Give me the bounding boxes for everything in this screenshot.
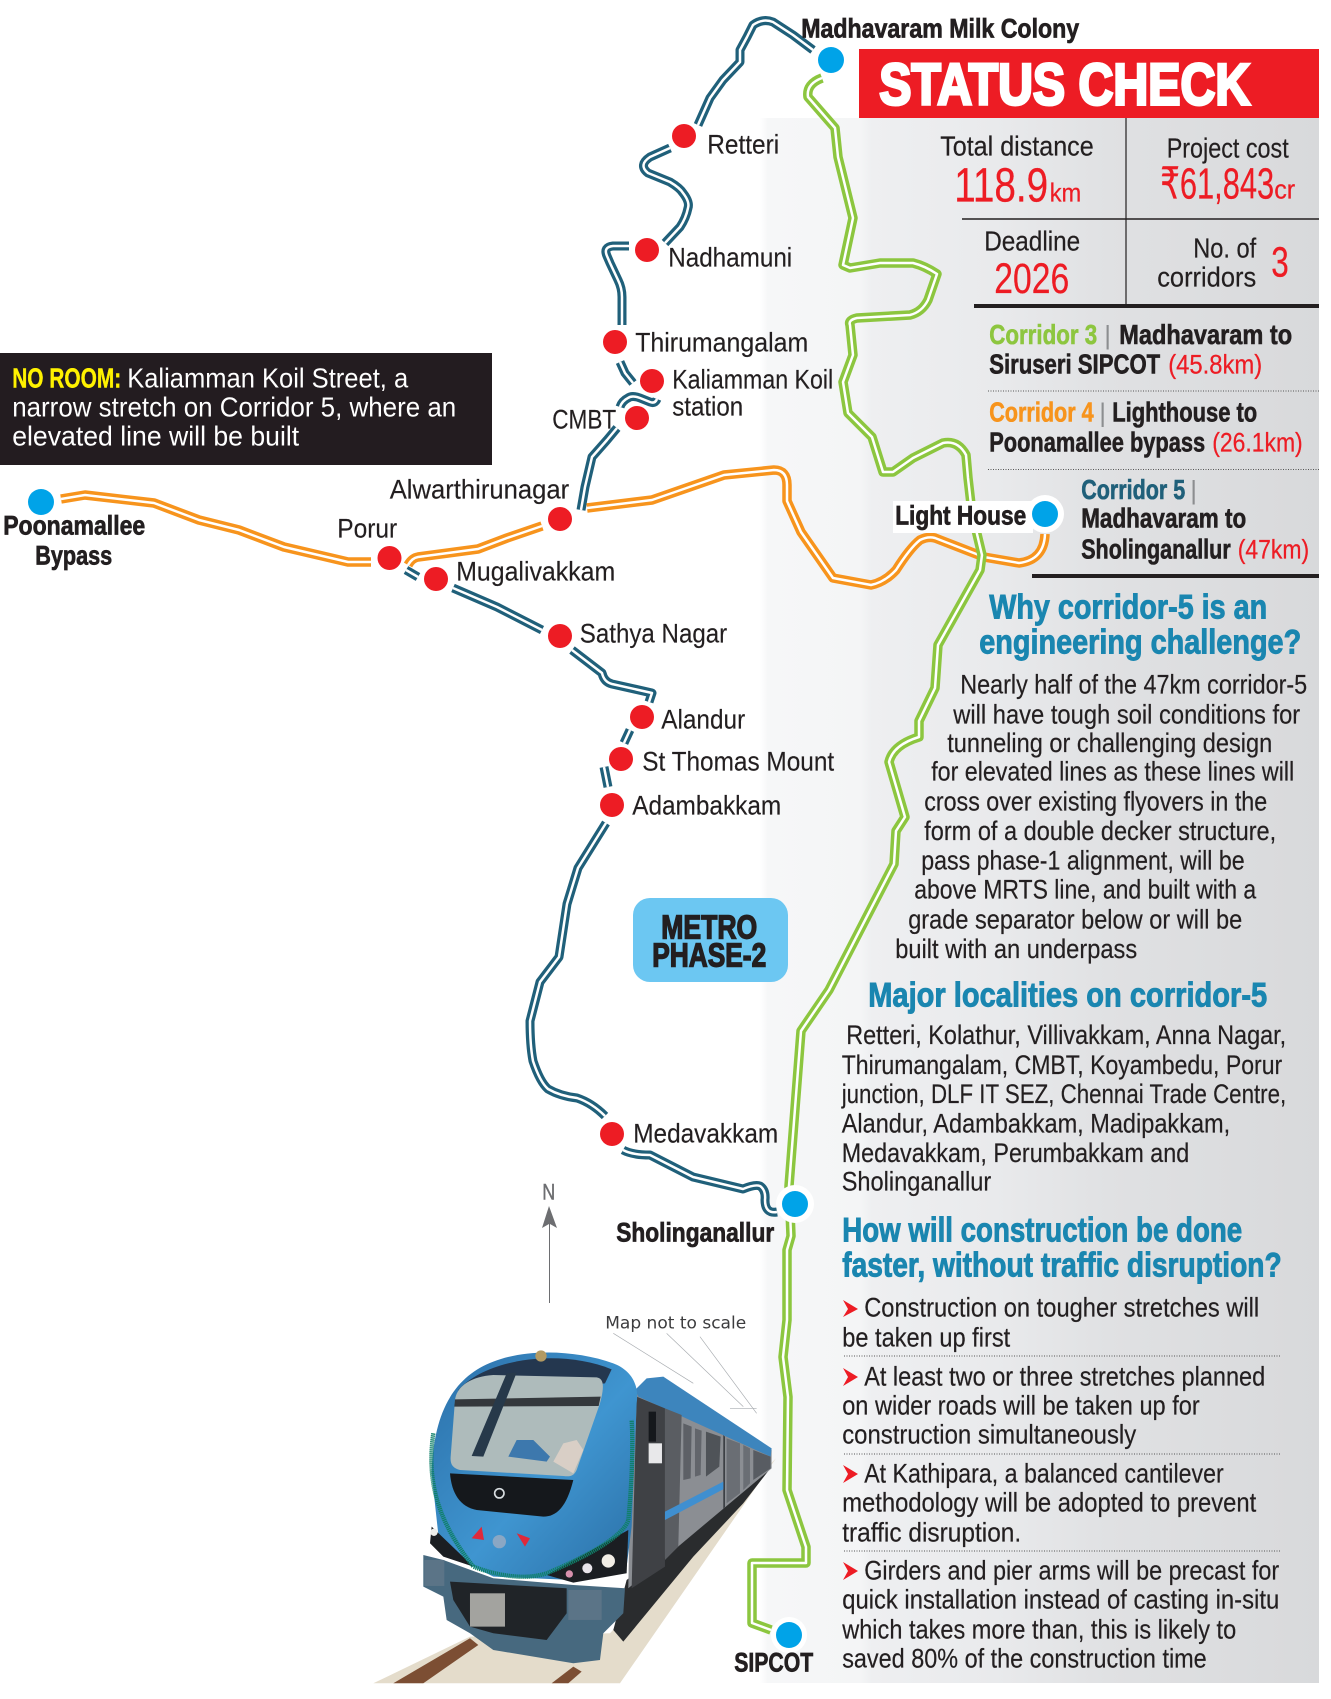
legend: corridor 3: Siruseri SIPCOT: [989, 348, 1160, 380]
stat: number of corridors: corridors: [1157, 262, 1256, 292]
legend: corridor 4: Poonamallee bypass: [989, 426, 1205, 458]
panel: status background: [760, 118, 1319, 1683]
legend: corridor 5: Corridor 5: [1081, 474, 1185, 505]
badge: Metro Phase-2: PHASE-2: [652, 936, 766, 974]
map: station dots: [28, 47, 844, 1653]
heading: how will construction be done faster: [842, 1212, 1282, 1284]
label: Poonamallee Bypass: [3, 510, 145, 570]
stat: total distance: 118.9: [954, 160, 1048, 212]
callout: No room: [0, 353, 492, 465]
label: Poonamallee Bypass: Bypass: [35, 540, 112, 570]
stat: project cost: [1160, 132, 1295, 208]
map: corridor 4 route line: [61, 470, 1045, 585]
text block: localities list: Medavakkam, Perumbakkam and: [842, 1138, 1189, 1168]
label: Poonamallee Bypass: Poonamallee: [3, 510, 145, 540]
legend: corridor 5: |: [1190, 475, 1197, 505]
callout: No room: Kaliamman Koil Street, a: [127, 362, 409, 394]
badge: Metro Phase-2: [633, 898, 788, 982]
stat: total distance: [940, 130, 1094, 212]
stat: deadline: Deadline: [984, 226, 1080, 256]
bullet: girders and pier arms: quick installation instead of casting in-situ: [842, 1584, 1279, 1614]
text block: localities list: Sholinganallur: [842, 1166, 991, 1196]
legend: corridor 5: Madhavaram to: [1081, 502, 1246, 534]
bullet: tougher stretches: be taken up first: [842, 1322, 1011, 1352]
legend: corridor 4: Corridor 4: [989, 396, 1094, 428]
label: Kaliamman Koil station: Kaliamman Koil: [672, 364, 833, 394]
stat: project cost: cr: [1274, 174, 1295, 204]
stat: total distance: km: [1050, 178, 1081, 208]
illustration: metro train: [373, 1333, 776, 1683]
legend: corridor 4: (26.1km): [1212, 428, 1303, 458]
heading: why corridor-5 is an engineering challenge: [979, 588, 1301, 662]
bullet: wider roads: At least two or three stretches planned: [864, 1362, 1265, 1392]
label: Sholinganallur: Sholinganallur: [616, 1218, 775, 1248]
label: Mugalivakkam: Mugalivakkam: [456, 556, 615, 586]
bullet: Kathipara: traffic disruption.: [842, 1518, 1021, 1548]
label: Alandur: Alandur: [661, 704, 745, 734]
legend: corridor 4: [989, 396, 1303, 458]
label: Sathya Nagar: Sathya Nagar: [580, 618, 727, 648]
bullet: Kathipara: methodology will be adopted to prevent: [842, 1488, 1257, 1518]
label: Porur: Porur: [337, 514, 397, 544]
label: Madhavaram Milk Colony: Madhavaram Milk Colony: [801, 14, 1079, 44]
label: Map not to scale: Map not to scale: [605, 1314, 746, 1334]
legend: corridor 3: (45.8km): [1168, 350, 1262, 380]
label: Medavakkam: Medavakkam: [633, 1118, 778, 1148]
text block: engineering challenge explanation: built with an underpass: [895, 934, 1137, 964]
text block: engineering challenge explanation: [895, 670, 1307, 964]
label: Kaliamman Koil station: [672, 364, 833, 422]
stat: number of corridors: 3: [1271, 238, 1289, 286]
legend: corridor 4: |: [1099, 398, 1106, 428]
label: SIPCOT: SIPCOT: [734, 1648, 814, 1678]
heading: how will construction be done faster: How will construction be done: [842, 1212, 1242, 1250]
stat: total distance: Total distance: [940, 130, 1094, 162]
label: Retteri: Retteri: [707, 130, 779, 160]
label: Thirumangalam: Thirumangalam: [635, 328, 808, 358]
text block: engineering challenge explanation: form of a double decker structure,: [924, 816, 1276, 846]
text block: engineering challenge explanation: tunneling or challenging design: [947, 728, 1272, 758]
bullet: tougher stretches: Construction on tougher stretches will: [864, 1292, 1259, 1322]
text block: localities list: [841, 1020, 1286, 1196]
bullet: girders and pier arms: which takes more than, this is likely to: [841, 1614, 1236, 1644]
legend: corridor 4: Lighthouse to: [1112, 396, 1257, 428]
label: Kaliamman Koil station: station: [672, 392, 743, 422]
bullet: girders and pier arms: [841, 1556, 1279, 1674]
callout: No room: narrow stretch on Corridor 5, where an: [12, 392, 456, 422]
label: Alwarthirunagar: Alwarthirunagar: [390, 474, 569, 504]
icon: north arrow: [542, 1180, 557, 1303]
bullet: wider roads: construction simultaneously: [842, 1420, 1137, 1450]
text block: localities list: Alandur, Adambakkam, Madipakkam,: [842, 1108, 1230, 1138]
heading: major localities: Major localities on corridor-5: [868, 976, 1267, 1014]
heading: why corridor-5 is an engineering challenge: Why corridor-5 is an: [989, 588, 1267, 626]
label: CMBT: CMBT: [552, 404, 616, 434]
bullet: girders and pier arms: Girders and pier arms will be precast for: [864, 1556, 1279, 1586]
legend: corridor 5: [1081, 474, 1309, 564]
legend: corridor 5: (47km): [1238, 534, 1309, 564]
label: Nadhamuni: Nadhamuni: [668, 242, 792, 272]
text block: engineering challenge explanation: above MRTS line, and built with a: [914, 874, 1257, 904]
stat: number of corridors: No. of: [1193, 232, 1256, 264]
map: corridor 5 route line: [406, 21, 813, 1212]
legend: corridor 3: |: [1104, 320, 1111, 350]
bullet: Kathipara: [842, 1458, 1257, 1548]
heading: Status Check: STATUS CHECK: [879, 52, 1250, 118]
bullet: wider roads: on wider roads will be taken up for: [842, 1390, 1200, 1420]
bullet: tougher stretches: [842, 1292, 1259, 1352]
text block: engineering challenge explanation: grade separator below or will be: [908, 904, 1242, 934]
bullet: wider roads: [842, 1362, 1265, 1450]
label: Adambakkam: Adambakkam: [632, 790, 781, 820]
legend: corridor 5: Sholinganallur: [1081, 534, 1231, 564]
bullet: girders and pier arms: saved 80% of the construction time: [842, 1644, 1207, 1674]
icon: north arrow: N: [542, 1180, 555, 1204]
stat: project cost: ₹61,843: [1160, 160, 1274, 208]
label: St Thomas Mount: St Thomas Mount: [642, 746, 835, 776]
stat: deadline: [984, 226, 1080, 303]
text block: engineering challenge explanation: pass phase-1 alignment, will be: [921, 846, 1245, 876]
bullet: Kathipara: At Kathipara, a balanced cantilever: [864, 1458, 1224, 1488]
legend: corridor 3: Corridor 3: [989, 319, 1097, 350]
stat: number of corridors: [1157, 232, 1289, 292]
label: Light House with station dot: Light House: [895, 500, 1026, 530]
callout: No room: elevated line will be built: [12, 420, 299, 452]
text block: engineering challenge explanation: cross over existing flyovers in the: [924, 786, 1267, 816]
callout: No room: NO ROOM:: [12, 362, 121, 394]
stat: project cost: Project cost: [1167, 132, 1289, 164]
map: corridor 3 route line: [752, 78, 982, 1630]
legend: corridor 3: [989, 319, 1292, 380]
badge: Metro Phase-2: METRO: [661, 908, 757, 946]
stats grid: [940, 118, 1319, 306]
stat: deadline: 2026: [994, 255, 1069, 303]
legend: corridor 3: Madhavaram to: [1119, 319, 1292, 350]
